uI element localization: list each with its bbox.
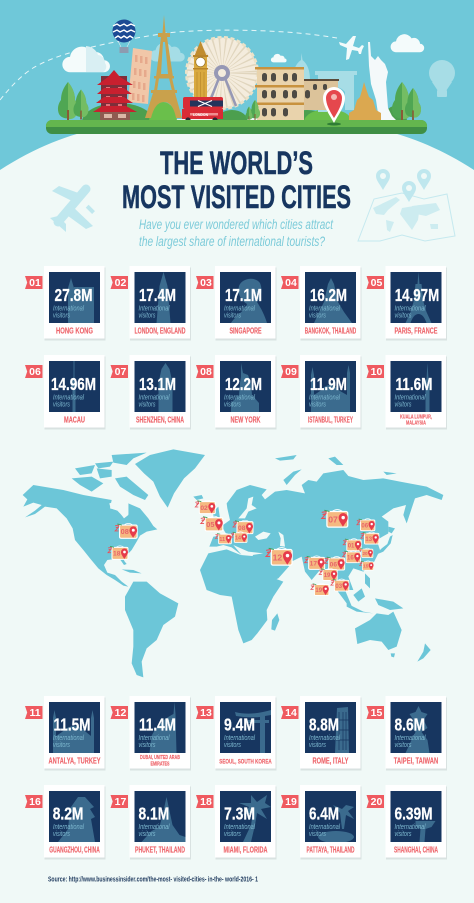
map: Arctic islands: [72, 453, 148, 500]
map: location markers: 17: [310, 561, 317, 568]
subtitle: [139, 217, 334, 249]
map: location markers: 08: [238, 525, 246, 532]
card 04 Bangkok: visitors: [309, 312, 326, 320]
card 09 Istanbul: ISTANBUL, TURKEY: [308, 416, 353, 424]
card 13 Seoul: [196, 696, 276, 770]
landmark: colosseum building: [255, 67, 339, 120]
card 05 Paris: 14.97M: [395, 285, 439, 305]
card 14 Rome: 8.8M: [309, 715, 339, 735]
map: South America: [125, 582, 178, 677]
card 05 Paris: 05: [371, 277, 382, 289]
card 02 London: [110, 266, 191, 340]
card 05 Paris: PARIS, FRANCE: [394, 326, 438, 336]
card 14 Rome: [281, 696, 362, 770]
card 13 Seoul: visitors: [224, 742, 241, 749]
map: location markers: 18: [113, 551, 121, 558]
card 11 Antalya: 11: [29, 707, 41, 719]
card 16 Guangzhou: GUANGZHOU, CHINA: [49, 846, 100, 854]
hills behind skyline: [82, 102, 407, 120]
ground strip: [46, 120, 427, 134]
card 12 Dubai: 11.4M: [139, 715, 176, 735]
card 06 Macau: International: [53, 394, 84, 402]
map: Hudson Bay and inland seas: [109, 497, 285, 547]
card 18 Miami: 7.3M: [224, 804, 255, 824]
icon: location pin: [323, 87, 345, 126]
flight path dashed arc: [0, 30, 337, 100]
card 20 Shanghai: [366, 785, 447, 860]
card 14 Rome: 14: [285, 707, 297, 719]
card 07 Shenzhen: [110, 355, 191, 430]
card 07 Shenzhen: SHENZHEN, CHINA: [136, 416, 184, 424]
card 03 Singapore: SINGAPORE: [230, 326, 262, 336]
card 08 New York: International: [224, 394, 255, 402]
card 12 Dubai: International: [138, 735, 170, 742]
card 12 Dubai: EMIRATES: [150, 762, 170, 768]
card 14 Rome: ROME, ITALY: [312, 756, 349, 766]
title: THE WORLD’S: [160, 145, 313, 181]
card 02 London: 02: [115, 277, 126, 289]
card 03 Singapore: 03: [200, 277, 212, 289]
card 15 Taipei: International: [394, 735, 426, 742]
card 08 New York: visitors: [224, 402, 241, 408]
card 10 Kuala Lumpur: [366, 355, 447, 430]
card 01 Hong Kong: visitors: [53, 312, 70, 320]
landmark: Eiffel tower: [145, 15, 182, 118]
card 04 Bangkok: 04: [285, 277, 297, 289]
card 11 Antalya: visitors: [53, 742, 70, 749]
card 11 Antalya: ANTALYA, TURKEY: [48, 756, 101, 766]
card 07 Shenzhen: 13.1M: [139, 374, 176, 394]
card 18 Miami: visitors: [224, 831, 241, 838]
subtitle: the largest share of international tourists?: [139, 234, 325, 249]
map: Australia: [355, 612, 402, 650]
card 15 Taipei: TAIPEI, TAIWAN: [394, 756, 438, 766]
card 06 Macau: 06: [29, 366, 41, 378]
map: location markers: 01: [348, 543, 355, 549]
map: UK Iceland and Arctic Russian islands: [193, 455, 397, 520]
card 18 Miami: [196, 785, 276, 860]
map: location markers: 08: [121, 527, 129, 536]
icon: pale hot air balloon: [429, 60, 455, 97]
icon: clouds: [62, 34, 424, 72]
card 18 Miami: 18: [200, 796, 212, 808]
card 12 Dubai: DUBAI, UNITED ARAB: [140, 755, 180, 761]
card 14 Rome: visitors: [309, 742, 326, 749]
card 17 Phuket: PHUKET, THAILAND: [135, 844, 185, 854]
card 13 Seoul: SEOUL, SOUTH KOREA: [219, 758, 272, 766]
card 17 Phuket: International: [138, 824, 170, 831]
icon: trees left: [58, 82, 260, 122]
card 16 Guangzhou: 16: [29, 796, 41, 808]
card 06 Macau: [25, 355, 106, 430]
card 07 Shenzhen: International: [138, 394, 170, 402]
landmark: pale arch: [315, 71, 357, 112]
card 13 Seoul: 9.4M: [224, 715, 255, 735]
landmark: Big Ben: [193, 41, 208, 100]
map: location markers: 06: [330, 561, 337, 568]
card 03 Singapore: [196, 266, 276, 340]
map: Japan: [375, 527, 395, 555]
card 15 Taipei: visitors: [394, 742, 412, 749]
card 17 Phuket: [110, 785, 191, 860]
card 01 Hong Kong: International: [53, 306, 84, 312]
map: location markers: 03: [335, 584, 343, 590]
card 20 Shanghai: International: [394, 824, 426, 831]
landmark: red pagoda: [93, 70, 137, 120]
source line: Source: http://www.businessinsider.com/the-most- visited-cities- in-the- world-2016- 1: [48, 876, 258, 884]
card 09 Istanbul: 09: [285, 366, 297, 378]
card 13 Seoul: International: [224, 735, 255, 742]
header sky band: [0, 0, 474, 170]
landmark: ferris wheel: [186, 38, 258, 108]
card 04 Bangkok: 16.2M: [310, 285, 347, 305]
map: world continents: [23, 449, 443, 677]
card 03 Singapore: 17.1M: [225, 285, 262, 305]
card 17 Phuket: 8.1M: [138, 804, 169, 824]
card 10 Kuala Lumpur: KUALA LUMPUR,: [400, 414, 432, 420]
landmark: golden buddha: [349, 82, 381, 120]
card 01 Hong Kong: HONG KONG: [56, 326, 93, 336]
card 08 New York: [196, 355, 276, 430]
map: location markers: 19: [324, 573, 331, 579]
map: location markers: 07: [328, 514, 338, 524]
card 18 Miami: MIAMI, FLORIDA: [224, 844, 268, 854]
card 05 Paris: International: [394, 306, 426, 312]
landmark: red double decker bus: LONDON: [193, 113, 209, 117]
card 08 New York: 08: [200, 366, 212, 378]
card 06 Macau: MACAU: [64, 416, 85, 424]
icon: trees right: [392, 82, 421, 122]
map: location markers: 11: [219, 537, 225, 543]
map: location markers: 06: [361, 523, 369, 529]
card 19 Pattaya: [281, 785, 362, 860]
card 20 Shanghai: visitors: [394, 831, 412, 838]
card 09 Istanbul: [281, 355, 362, 430]
card 09 Istanbul: International: [309, 394, 340, 402]
landmark: leaning pink tower: [128, 48, 152, 104]
card 17 Phuket: visitors: [138, 831, 156, 838]
card 10 Kuala Lumpur: 10: [371, 366, 382, 378]
map: location markers: 05: [206, 520, 214, 529]
map: North America: [23, 485, 157, 587]
card 11 Antalya: [25, 696, 106, 770]
card 12 Dubai: 12: [115, 707, 126, 719]
map: location markers: 13: [365, 537, 373, 543]
card 20 Shanghai: 20: [371, 796, 382, 808]
icon: striped hot air balloon: [112, 20, 136, 53]
map: Cuba Caribbean: [122, 569, 142, 573]
card 16 Guangzhou: [25, 785, 106, 860]
map: Africa: [200, 549, 283, 643]
title: [122, 145, 351, 215]
map: Tasmania New Zealand: [391, 643, 431, 662]
card 04 Bangkok: International: [309, 306, 340, 312]
card 02 London: 17.4M: [139, 285, 176, 305]
card 13 Seoul: 13: [200, 707, 212, 719]
card 12 Dubai: visitors: [138, 742, 156, 749]
map: Madagascar: [271, 613, 279, 631]
card 01 Hong Kong: 27.8M: [54, 285, 92, 305]
card 04 Bangkok: [281, 266, 362, 340]
card 19 Pattaya: PATTAYA, THAILAND: [306, 846, 355, 854]
card 15 Taipei: [366, 696, 447, 770]
card 16 Guangzhou: International: [53, 824, 84, 831]
card 15 Taipei: 15: [371, 707, 382, 719]
map: Greenland: [135, 449, 205, 508]
card 19 Pattaya: 19: [285, 796, 297, 808]
icon: pale airplane: [50, 186, 95, 232]
card 12 Dubai: [110, 696, 191, 770]
card 10 Kuala Lumpur: 11.6M: [396, 374, 432, 394]
icon: pale world map with pins: [358, 169, 455, 241]
card 02 London: visitors: [138, 312, 156, 320]
subtitle: Have you ever wondered which cities attract: [139, 217, 334, 232]
map: location markers: 16: [347, 555, 354, 561]
card 19 Pattaya: International: [309, 824, 340, 831]
map: location markers: 12: [273, 552, 282, 562]
map: location markers: 15: [363, 564, 369, 569]
card 02 London: LONDON, ENGLAND: [134, 326, 186, 336]
card 19 Pattaya: visitors: [309, 831, 326, 838]
card 07 Shenzhen: 07: [115, 366, 126, 378]
icon: airplane top right: [339, 36, 364, 60]
card 11 Antalya: 11.5M: [54, 715, 90, 735]
card 09 Istanbul: visitors: [309, 402, 326, 408]
title: MOST VISITED CITIES: [122, 179, 351, 215]
card 18 Miami: International: [224, 824, 255, 831]
card 20 Shanghai: SHANGHAI, CHINA: [394, 846, 438, 854]
map: location markers: 02: [200, 505, 208, 512]
card 03 Singapore: visitors: [224, 312, 241, 320]
card 17 Phuket: 17: [115, 796, 126, 808]
card 02 London: International: [138, 306, 170, 312]
card 15 Taipei: 8.6M: [394, 715, 425, 735]
landmark: pale dome: [293, 53, 310, 80]
map: location markers: 19: [315, 588, 323, 594]
map: location markers: 20: [362, 551, 368, 556]
card 05 Paris: visitors: [394, 312, 412, 320]
map: location markers: [108, 500, 379, 595]
card 10 Kuala Lumpur: MALAYSIA: [406, 420, 427, 426]
card 08 New York: 12.2M: [225, 374, 262, 394]
card 03 Singapore: International: [224, 306, 255, 312]
card 06 Macau: 14.96M: [51, 374, 96, 394]
map: Indonesia Philippines: [347, 573, 403, 613]
landmark: red double decker bus: [182, 97, 223, 123]
card 11 Antalya: International: [53, 735, 84, 742]
card 16 Guangzhou: 8.2M: [53, 804, 83, 824]
card 05 Paris: [366, 266, 447, 340]
card 10 Kuala Lumpur: International: [394, 394, 426, 402]
landmark: statue of liberty: [368, 42, 396, 120]
card 04 Bangkok: BANGKOK, THAILAND: [305, 326, 356, 336]
card 01 Hong Kong: [25, 266, 106, 340]
card 07 Shenzhen: visitors: [138, 402, 156, 408]
card 19 Pattaya: 6.4M: [309, 804, 339, 824]
map: location markers: 14: [235, 536, 241, 542]
card 06 Macau: visitors: [53, 402, 70, 408]
map: Eurasia: [209, 470, 443, 610]
card 01 Hong Kong: 01: [29, 277, 41, 289]
card 20 Shanghai: 6.39M: [394, 804, 432, 824]
card 10 Kuala Lumpur: visitors: [394, 402, 412, 408]
card 16 Guangzhou: visitors: [53, 831, 70, 838]
card 14 Rome: International: [309, 735, 340, 742]
card 08 New York: NEW YORK: [230, 416, 261, 424]
card 09 Istanbul: 11.9M: [310, 374, 347, 394]
